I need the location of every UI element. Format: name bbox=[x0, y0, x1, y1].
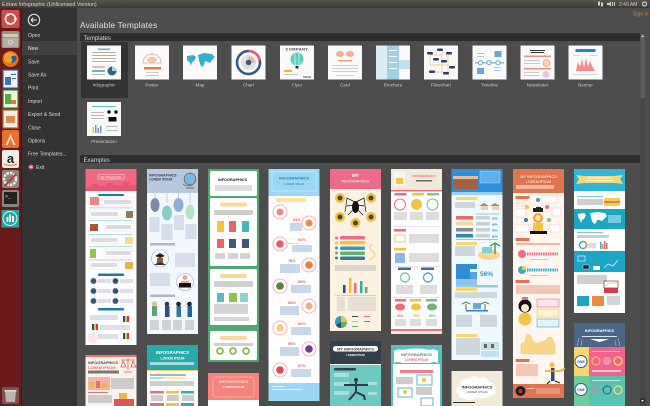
icon: trash bbox=[2, 387, 19, 404]
template: banner: Banner bbox=[578, 82, 593, 88]
template: chart bbox=[232, 46, 266, 88]
section bar: templates bbox=[80, 33, 640, 42]
example: blue food infographic: LOREM IPSUM bbox=[284, 182, 304, 186]
icon: terminal: >_ bbox=[5, 194, 11, 200]
template: flyer: Flyer bbox=[292, 82, 303, 88]
example: cloud teal infographic lower: INFOGRAPHICS bbox=[401, 352, 432, 357]
icon: files bbox=[2, 31, 20, 48]
example: yoga infographic lower bbox=[330, 341, 381, 406]
example: cloud teal infographic lower: LOREM IPSUM bbox=[405, 358, 428, 362]
example: navy and pink infographic lower: ONE bbox=[577, 388, 585, 392]
section bar: examples bbox=[80, 155, 640, 164]
example: orange clown infographic bbox=[513, 169, 565, 398]
icon: firefox bbox=[2, 51, 18, 67]
scrollbar bbox=[640, 33, 646, 406]
example: scales infographic lower: INFOGRAPHICS bbox=[88, 360, 118, 365]
icon: calc bbox=[3, 90, 18, 108]
example: spider infographic: INFOGRAPHICS bbox=[341, 180, 370, 184]
icon: exit bbox=[28, 164, 34, 170]
example: cloud beige infographic lower: INFOGRAPHICS bbox=[462, 384, 493, 390]
example: travel infographic: 80% bbox=[492, 234, 498, 238]
template: poster bbox=[135, 46, 169, 88]
icon: impress bbox=[3, 110, 18, 128]
example: coral infographic lower: LOREM IPSUM bbox=[223, 385, 245, 389]
example: coral infographic lower: INFOGRAPHICS bbox=[219, 380, 249, 384]
template: banner bbox=[568, 46, 602, 88]
example: blue food infographic: 56% bbox=[298, 280, 306, 284]
example: blue food infographic: 66% bbox=[298, 322, 306, 326]
template: card: Card bbox=[340, 82, 350, 88]
example: blue food infographic: 50% bbox=[288, 342, 296, 346]
example: pink infographic: My Infographic bbox=[100, 176, 122, 180]
template: infographic: Infographic bbox=[93, 82, 116, 88]
example: blue world infographic bbox=[574, 169, 625, 313]
file menu panel: Save As bbox=[28, 72, 47, 78]
template: brochure: Brochure bbox=[384, 82, 403, 88]
example: cloud beige infographic lower bbox=[452, 371, 502, 406]
template: chart: Chart bbox=[243, 82, 255, 88]
example: education infographic bbox=[147, 169, 198, 334]
file menu panel: Save bbox=[28, 60, 40, 66]
example: education infographic: LOREM IPSUM bbox=[149, 178, 173, 182]
selected template highlight bbox=[81, 42, 128, 98]
example: spider infographic: MY bbox=[352, 173, 359, 178]
template: poster: Poster bbox=[145, 82, 159, 88]
section bar: templates: Templates bbox=[84, 36, 111, 42]
template: map bbox=[183, 46, 217, 88]
example: education infographic: INFOGRAPHICS bbox=[149, 174, 177, 178]
file menu panel: New bbox=[28, 46, 38, 52]
example: navy and pink infographic lower: ONE bbox=[577, 360, 585, 364]
title bar: 2:49 AM bbox=[619, 2, 637, 8]
file menu panel: Open bbox=[28, 33, 40, 39]
file menu panel: Exit bbox=[36, 165, 45, 171]
template: flyer bbox=[280, 46, 314, 88]
template: presentation bbox=[87, 102, 121, 144]
example: yoga infographic lower: LOREM IPSUM bbox=[346, 353, 365, 357]
example: blue food infographic: 63% bbox=[293, 218, 301, 222]
example: travel infographic: 70% bbox=[492, 228, 498, 232]
example: cloud beige infographic lower: LOREM IPSUM bbox=[466, 390, 488, 394]
icon: edraw infographic bbox=[2, 210, 19, 228]
example: navy and pink infographic lower bbox=[574, 323, 625, 406]
example: health infographic: INFOGRAPHICS bbox=[412, 174, 436, 178]
example: navy and pink infographic lower: INFOGRAPHICS bbox=[585, 329, 615, 333]
example: cloud teal infographic lower bbox=[391, 345, 442, 406]
title bar: Edraw Infographic (Unlicensed Version) bbox=[2, 2, 97, 8]
template: timeline bbox=[472, 46, 506, 88]
example: pink infographic bbox=[86, 169, 136, 345]
template: infographic bbox=[87, 46, 121, 88]
example: blue world infographic: My Infographics bbox=[588, 176, 611, 180]
icon: amazon: a bbox=[7, 151, 15, 166]
template: flowchart: Flowchart bbox=[431, 82, 452, 88]
file menu panel bbox=[22, 8, 77, 406]
example: health infographic: 60% bbox=[397, 314, 403, 318]
example: teal infographic lower: LOREM IPSUM bbox=[161, 356, 185, 360]
section bar: examples: Examples bbox=[84, 158, 110, 164]
template: timeline: Timeline bbox=[481, 82, 499, 88]
example: scales infographic lower bbox=[86, 355, 136, 406]
icon: system settings bbox=[2, 170, 19, 188]
file menu panel: Close bbox=[28, 126, 41, 132]
template: newsletter: Newsletter bbox=[527, 82, 549, 88]
example: green recycling infographic bbox=[208, 169, 259, 362]
example: yoga infographic lower: MY INFOGRAPHICS bbox=[337, 346, 374, 352]
file menu panel: Free Templates... bbox=[28, 152, 67, 158]
file menu panel: Import bbox=[28, 99, 43, 105]
example: blue food infographic bbox=[268, 169, 320, 401]
example: spider infographic bbox=[330, 169, 381, 331]
template: presentation: Presentation bbox=[91, 139, 117, 144]
file menu panel: Export & Send bbox=[28, 112, 60, 118]
example: teal infographic lower bbox=[147, 345, 198, 406]
template: brochure bbox=[376, 46, 410, 88]
file menu panel: Print bbox=[28, 86, 39, 92]
example: green recycling infographic: INFOGRAPHICS bbox=[218, 178, 248, 182]
example: blue food infographic: 87% bbox=[298, 364, 306, 368]
example: blue food infographic: INFOGRAPHICS bbox=[279, 176, 309, 180]
example: scales infographic lower: LOREM IPSUM bbox=[88, 365, 115, 370]
example: coral infographic lower bbox=[208, 373, 259, 406]
icon: terminal bbox=[2, 190, 19, 207]
launcher sidebar bbox=[0, 8, 22, 406]
file menu panel: Options bbox=[28, 138, 46, 144]
example: blue food infographic: 92% bbox=[298, 238, 306, 242]
example: travel infographic: 60% bbox=[492, 222, 498, 226]
title bar bbox=[0, 0, 650, 8]
template: flowchart bbox=[424, 46, 458, 88]
example: health infographic bbox=[391, 169, 442, 334]
icon: software center bbox=[2, 130, 19, 148]
icon: writer bbox=[3, 70, 18, 88]
example: blue food infographic: 78% bbox=[288, 259, 296, 263]
example: teal infographic lower: INFOGRAPHICS bbox=[156, 350, 189, 355]
example: orange clown infographic: MY INFOGRAPHICS bbox=[520, 174, 557, 179]
example: health infographic: 50% bbox=[429, 314, 435, 318]
example: blue food infographic: 84% bbox=[288, 301, 296, 305]
template: map: Map bbox=[196, 82, 205, 88]
icon: ubuntu bbox=[2, 10, 20, 28]
template: newsletter bbox=[520, 46, 554, 88]
example: travel infographic bbox=[452, 169, 502, 360]
heading: available templates: Available Templates bbox=[80, 20, 157, 30]
template: card bbox=[328, 46, 362, 88]
icon: amazon bbox=[2, 150, 19, 168]
example: travel infographic: 56% bbox=[480, 271, 493, 278]
template: flyer: COMPANY bbox=[286, 48, 308, 52]
icon: back button bbox=[28, 14, 40, 26]
sign in link: Sign In bbox=[633, 12, 649, 18]
example: orange clown infographic: LOREM IPSUM bbox=[526, 180, 551, 184]
example: health infographic: 75% bbox=[413, 314, 419, 318]
example: travel infographic: 50% bbox=[492, 216, 498, 220]
